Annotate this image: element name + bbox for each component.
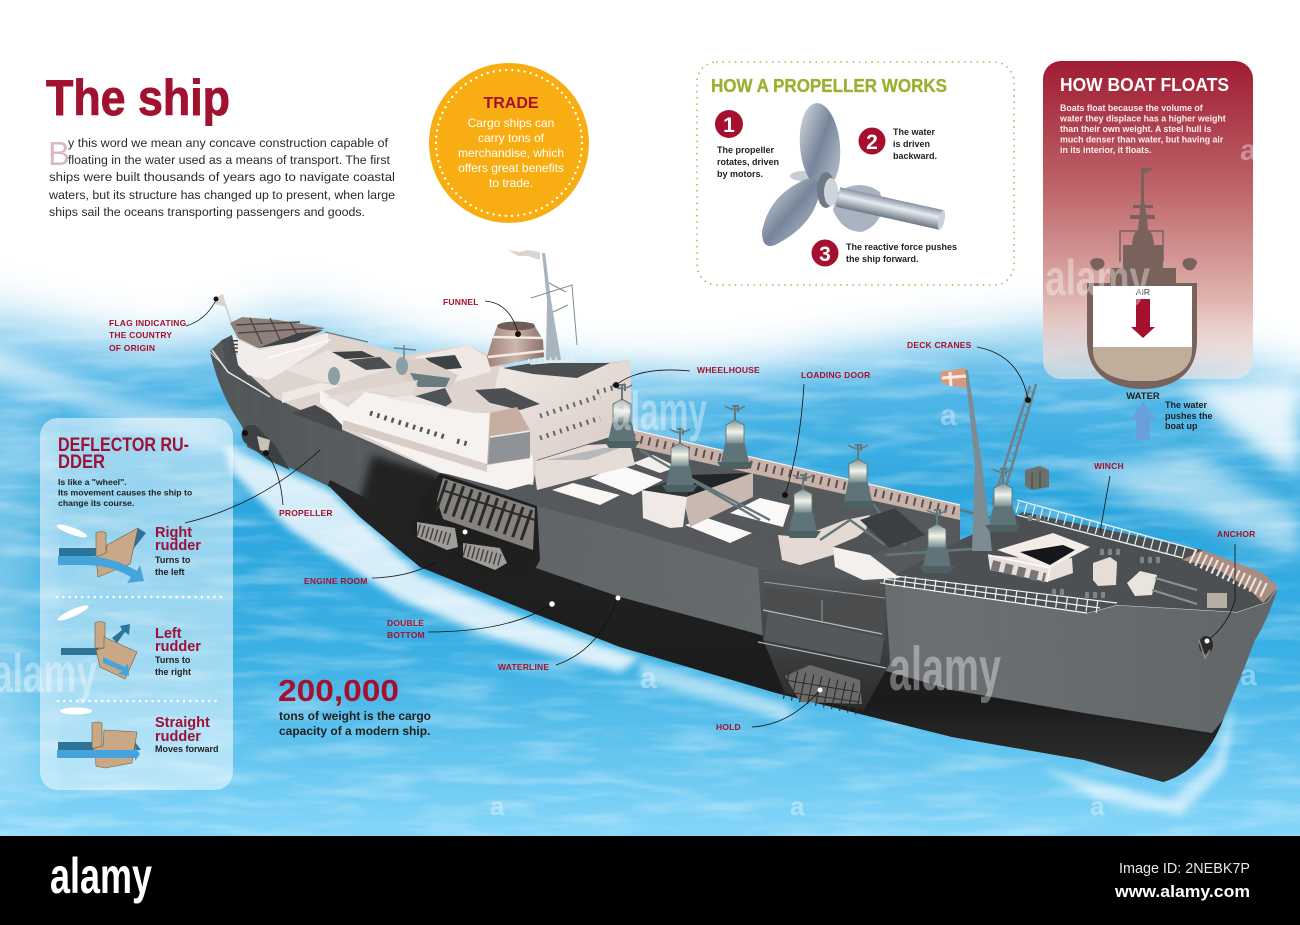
intro text block bbox=[48, 135, 395, 219]
divider bbox=[58, 700, 221, 702]
air label: AIR bbox=[1136, 287, 1150, 297]
label: hold bbox=[716, 688, 822, 732]
step 2: backward. bbox=[893, 151, 937, 161]
label: double bottom: BOTTOM bbox=[387, 630, 425, 640]
label: wheelhouse: WHEELHOUSE bbox=[697, 365, 760, 375]
panel text bbox=[1059, 103, 1226, 155]
step 1 bbox=[715, 110, 779, 179]
left rudder text: rudder bbox=[155, 639, 201, 655]
panel intro text: change its course. bbox=[58, 498, 134, 508]
panel intro text: Its movement causes the ship to bbox=[58, 488, 192, 498]
straight rudder text bbox=[155, 715, 219, 754]
panel intro text bbox=[58, 477, 192, 508]
lifeboat and mid deck bbox=[328, 345, 492, 407]
label: propeller bbox=[267, 455, 333, 518]
aft deck house bbox=[533, 443, 635, 490]
step 2 bbox=[858, 127, 937, 161]
callout: trade: offers great benefits bbox=[458, 161, 564, 175]
far railing bbox=[1017, 500, 1197, 558]
label: anchor bbox=[1204, 529, 1256, 644]
panel: how a propeller works bbox=[697, 62, 1014, 285]
main mast bbox=[508, 250, 577, 361]
right rudder text bbox=[155, 525, 201, 577]
forward house bbox=[833, 530, 905, 555]
step 2: The water bbox=[893, 127, 936, 137]
intro text block: ships sail the oceans transporting passengers and goods. bbox=[49, 205, 365, 219]
superstructure base bbox=[238, 333, 632, 485]
footer logo: alamy bbox=[50, 848, 152, 904]
callout: trade: to trade. bbox=[489, 176, 533, 190]
main deck bbox=[210, 340, 960, 584]
step 3: the ship forward. bbox=[846, 254, 919, 264]
callout: trade: Cargo ships can bbox=[468, 116, 554, 130]
roof lattice bbox=[230, 317, 325, 348]
left rudder text bbox=[155, 626, 201, 677]
label: flag: OF ORIGIN bbox=[109, 343, 155, 353]
stat: 200,000 bbox=[278, 673, 431, 738]
arrow: down bbox=[1131, 299, 1155, 338]
label: loading door: LOADING DOOR bbox=[801, 370, 870, 380]
propeller illustration bbox=[762, 101, 947, 246]
left rudder text: Left bbox=[155, 626, 182, 642]
mid ship hatches and houses bbox=[533, 443, 1000, 580]
near railing bbox=[880, 575, 1117, 613]
intro text block: waters, but its structure has changed up to present, when large bbox=[48, 188, 395, 202]
panel text: than their own weight. A steel hull is bbox=[1060, 124, 1211, 134]
divider bbox=[57, 596, 221, 598]
main superstructure bbox=[320, 360, 632, 490]
label: flag: THE COUNTRY bbox=[109, 330, 172, 340]
step 1: rotates, driven bbox=[717, 157, 779, 167]
step 3: The reactive force pushes bbox=[846, 242, 957, 252]
engine room cutaway bbox=[410, 473, 540, 578]
mast flag bbox=[508, 250, 540, 260]
stern gear bbox=[242, 425, 290, 470]
side wall bbox=[282, 383, 342, 403]
panel: deflector rudder: DDER bbox=[58, 451, 105, 473]
hull interior water line bbox=[1093, 347, 1192, 381]
boat silhouette bbox=[1087, 168, 1197, 389]
keel below the waterline bbox=[328, 480, 1224, 782]
intro text block: floating in the water used as a means of transport. The first bbox=[68, 153, 391, 167]
cabin cutaway bbox=[487, 407, 530, 465]
sea background bbox=[0, 180, 1300, 836]
left rudder text: Turns to bbox=[155, 655, 191, 665]
panel intro text: Is like a "wheel". bbox=[58, 477, 127, 487]
label: propeller: PROPELLER bbox=[279, 508, 333, 518]
label: winch: WINCH bbox=[1094, 461, 1124, 471]
label: waterline bbox=[498, 596, 620, 672]
right rudder text: the left bbox=[155, 567, 185, 577]
pool deck bbox=[285, 350, 392, 383]
panel text: much denser than water, but having air bbox=[1060, 134, 1224, 144]
funnel bbox=[487, 322, 544, 367]
watermarks: a bbox=[790, 791, 805, 821]
label: flag bbox=[109, 296, 218, 353]
water caption: boat up bbox=[1165, 421, 1198, 431]
panel: deflector rudder bbox=[40, 418, 233, 790]
step 1: by motors. bbox=[717, 169, 763, 179]
label: hold: HOLD bbox=[716, 722, 741, 732]
anchor bbox=[1199, 636, 1213, 658]
hull interior air bbox=[1093, 286, 1192, 347]
far bulwark bbox=[625, 428, 960, 520]
title: The ship bbox=[46, 70, 230, 126]
deck crane boom bbox=[992, 384, 1049, 505]
diagram: right rudder bbox=[56, 522, 146, 583]
water label: WATER bbox=[1126, 391, 1160, 402]
aft house wall bbox=[232, 333, 328, 380]
hull bbox=[200, 340, 1290, 800]
hold cutaway bbox=[758, 568, 890, 710]
side deck bbox=[292, 405, 342, 432]
panel heading: HOW A PROPELLER WORKS bbox=[711, 75, 947, 96]
step 2: 2 bbox=[866, 131, 878, 154]
watermarks: alamy bbox=[889, 635, 1001, 704]
rails bbox=[530, 360, 578, 364]
aft deck bbox=[222, 335, 270, 395]
low hatch: dark sides bbox=[553, 493, 597, 513]
label: funnel bbox=[443, 297, 521, 337]
bollards bbox=[1028, 518, 1160, 595]
right rudder text: Turns to bbox=[155, 555, 191, 565]
cream block bbox=[683, 473, 753, 527]
cargo box bbox=[1025, 466, 1049, 490]
label: double bottom: DOUBLE bbox=[387, 618, 424, 628]
callout: trade bbox=[429, 63, 589, 223]
aft house and decks bbox=[212, 294, 632, 485]
panel text: in its interior, it floats. bbox=[1060, 145, 1151, 155]
step 1: The propeller bbox=[717, 145, 775, 155]
watermarks: a bbox=[1090, 791, 1105, 821]
deck locker bbox=[1207, 593, 1227, 608]
straight rudder text: Straight bbox=[155, 715, 210, 731]
panel text: water they displace has a higher weight bbox=[1059, 114, 1226, 124]
watermarks: alamy bbox=[612, 380, 707, 442]
straight rudder text: Moves forward bbox=[155, 744, 219, 754]
label: waterline: WATERLINE bbox=[498, 662, 549, 672]
footer url: www.alamy.com bbox=[1114, 882, 1250, 901]
straight rudder text: rudder bbox=[155, 729, 201, 745]
forecastle deck bbox=[880, 500, 1278, 613]
hatch roofs bbox=[552, 483, 620, 505]
callout: trade: TRADE bbox=[483, 95, 539, 112]
drum house bbox=[778, 515, 870, 565]
callout: trade: merchandise, which bbox=[458, 146, 564, 160]
crane jibs bbox=[640, 450, 1000, 555]
step 1: 1 bbox=[723, 114, 735, 137]
forward hatch house bbox=[988, 533, 1090, 582]
label: wheelhouse bbox=[613, 365, 760, 388]
label: funnel: FUNNEL bbox=[443, 297, 479, 307]
label: loading door bbox=[782, 370, 870, 498]
right rudder text: rudder bbox=[155, 538, 201, 554]
label: engine room: ENGINE ROOM bbox=[304, 576, 368, 586]
water caption: The water bbox=[1165, 400, 1208, 410]
windows bbox=[370, 413, 468, 444]
left rudder text: the right bbox=[155, 667, 191, 677]
stat: 200,000: tons of weight is the cargo bbox=[279, 709, 431, 723]
upper block bbox=[490, 360, 632, 458]
watermarks: a bbox=[1240, 134, 1257, 167]
watermarks: a bbox=[940, 399, 957, 432]
leader: rudder bbox=[185, 450, 320, 523]
step 3: 3 bbox=[819, 243, 831, 266]
stat: 200,000: 200,000 bbox=[278, 673, 399, 708]
step 2: is driven bbox=[893, 139, 930, 149]
label: winch bbox=[1094, 461, 1124, 532]
callout: trade: carry tons of bbox=[478, 131, 545, 145]
watermarks: a bbox=[1240, 659, 1257, 692]
dark shading beneath superstructure bbox=[356, 452, 440, 522]
panel: how boat floats bbox=[1043, 61, 1253, 440]
label: deck cranes bbox=[907, 340, 1031, 403]
ship cutaway illustration bbox=[200, 250, 1290, 800]
water caption: pushes the bbox=[1165, 411, 1213, 421]
drop cap: B bbox=[48, 135, 70, 172]
footer bar bbox=[0, 836, 1300, 925]
water caption bbox=[1165, 400, 1213, 431]
watermarks: a bbox=[640, 662, 657, 695]
watermarks: a bbox=[490, 791, 505, 821]
step 3 bbox=[812, 240, 957, 266]
cranes bbox=[604, 385, 1021, 573]
footer image id: Image ID: 2NEBK7P bbox=[1119, 860, 1250, 877]
label: engine room bbox=[304, 530, 468, 586]
fore mast and flag bbox=[940, 368, 992, 551]
right rudder text: Right bbox=[155, 525, 192, 541]
panel text: Boats float because the volume of bbox=[1060, 103, 1203, 113]
watermarks bbox=[0, 134, 1257, 821]
hull deck edge highlight bbox=[210, 352, 1278, 613]
bow fairing bbox=[1182, 550, 1278, 603]
panel heading: DEFLECTOR RU- bbox=[58, 434, 189, 456]
diagram: left rudder bbox=[56, 603, 137, 679]
stat: 200,000: capacity of a modern ship. bbox=[279, 724, 430, 738]
panel heading: HOW BOAT FLOATS bbox=[1060, 74, 1229, 95]
label: anchor: ANCHOR bbox=[1217, 529, 1256, 539]
winch bbox=[1093, 557, 1117, 586]
diagram: straight rudder bbox=[57, 708, 141, 768]
stern flag bbox=[215, 294, 226, 307]
generators bbox=[417, 522, 458, 550]
label: double bottom bbox=[387, 601, 555, 640]
label: flag: FLAG INDICATING bbox=[109, 318, 187, 328]
watermarks: alamy bbox=[1045, 250, 1150, 306]
label: deck cranes: DECK CRANES bbox=[907, 340, 972, 350]
intro text block: ships were built thousands of years ago to navigate coastal bbox=[49, 170, 395, 184]
dark deck well bbox=[687, 473, 750, 497]
intro text block: y this word we mean any concave construction capable of bbox=[68, 136, 389, 150]
arrow: up bbox=[1130, 402, 1156, 440]
